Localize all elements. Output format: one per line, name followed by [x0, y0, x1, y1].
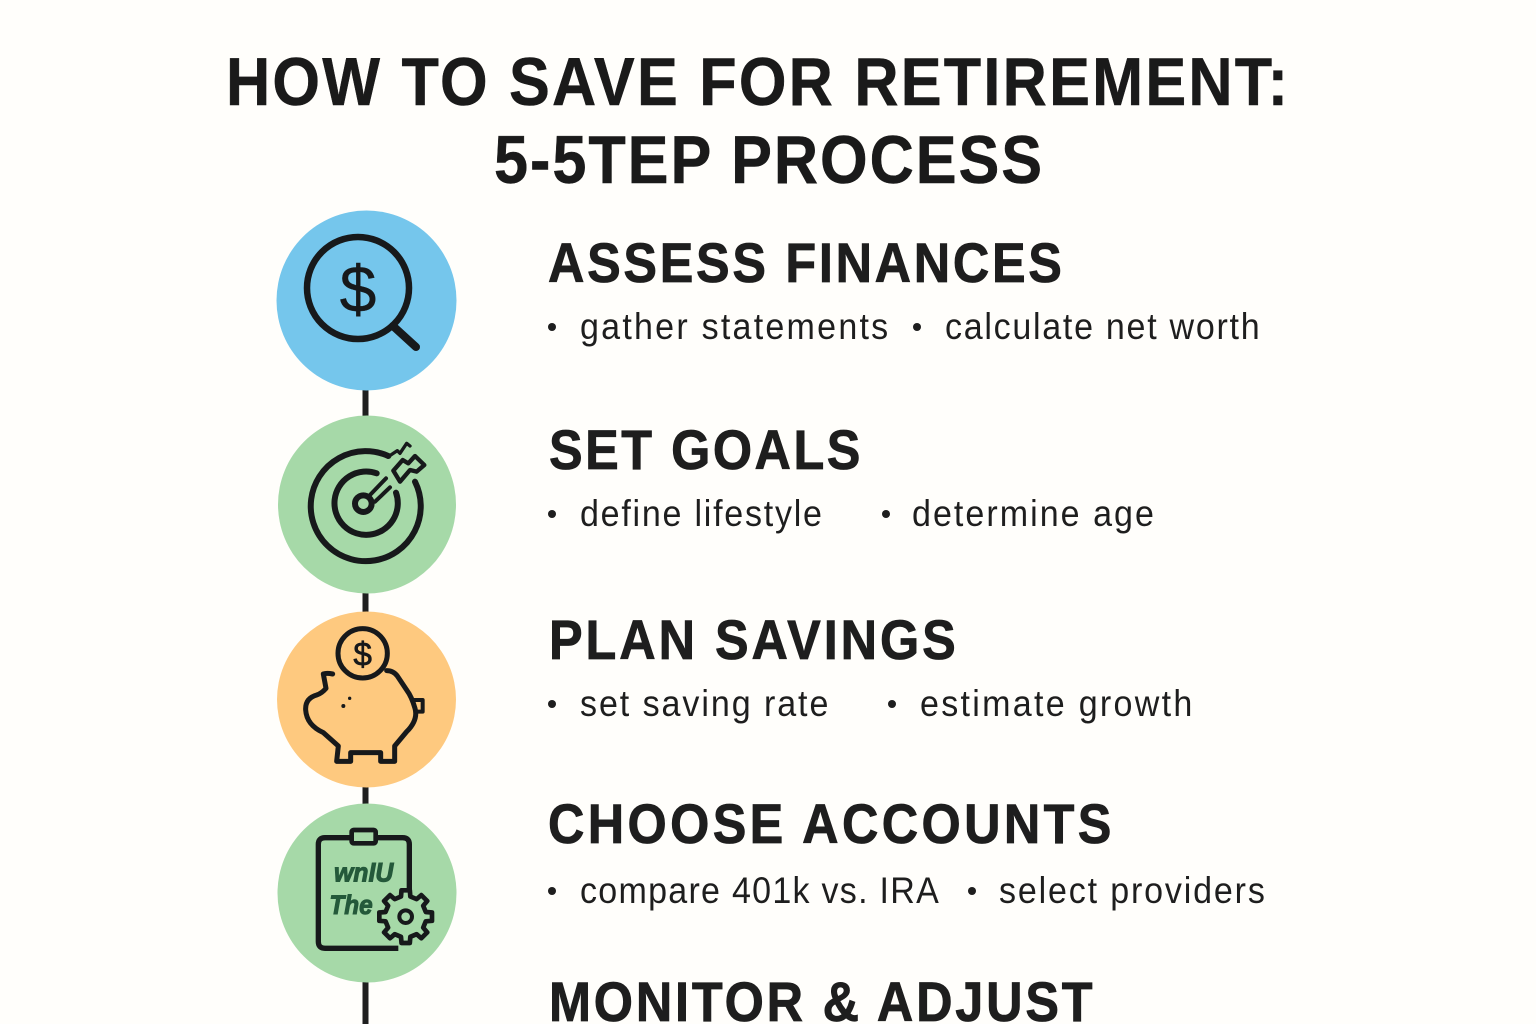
- bullets: assess finances: calculate net worth: [945, 306, 1260, 347]
- bullets: choose accounts: [548, 870, 1265, 911]
- bullets: plan savings: estimate growth: [920, 683, 1192, 724]
- bullets: assess finances: gather statements: [580, 306, 888, 347]
- title: [226, 43, 1288, 198]
- bullets: set goals: determine age: [912, 493, 1154, 534]
- title: HOW TO SAVE FOR RETIREMENT:: [226, 43, 1288, 120]
- bullets: plan savings: [548, 683, 1192, 724]
- heading: choose accounts: CHOOSE ACCOUNTS: [548, 794, 1111, 856]
- timeline connector: [362, 385, 368, 1024]
- icon: clipboard with gear: The: [329, 890, 373, 920]
- bullets: assess finances: [548, 306, 1260, 347]
- step 4: choose accounts: [278, 794, 1265, 982]
- bullets: set goals: define lifestyle: [580, 493, 822, 534]
- bullets: plan savings: set saving rate: [580, 683, 828, 724]
- icon: piggy bank with coin: $: [353, 637, 372, 674]
- icon: magnifying glass with dollar: $: [340, 252, 376, 326]
- heading: set goals: SET GOALS: [549, 420, 860, 482]
- step 2: set goals: [278, 416, 1154, 594]
- icon: magnifying glass with dollar: [276, 210, 456, 390]
- icon: clipboard with gear: wnIU: [334, 858, 394, 888]
- heading: assess finances: ASSESS FINANCES: [548, 233, 1062, 295]
- heading: plan savings: PLAN SAVINGS: [549, 610, 956, 672]
- step 3: plan savings: [277, 610, 1192, 788]
- bullets: choose accounts: select providers: [999, 870, 1265, 911]
- icon: clipboard with gear: [278, 804, 456, 982]
- bullets: choose accounts: compare 401k vs. IRA: [580, 870, 939, 911]
- step 1: assess finances: [276, 210, 1260, 390]
- icon: piggy bank with coin: [277, 612, 456, 788]
- title: 5-5TEP PROCESS: [494, 121, 1042, 198]
- icon: target with dart: [278, 416, 456, 594]
- bullets: set goals: [548, 493, 1154, 534]
